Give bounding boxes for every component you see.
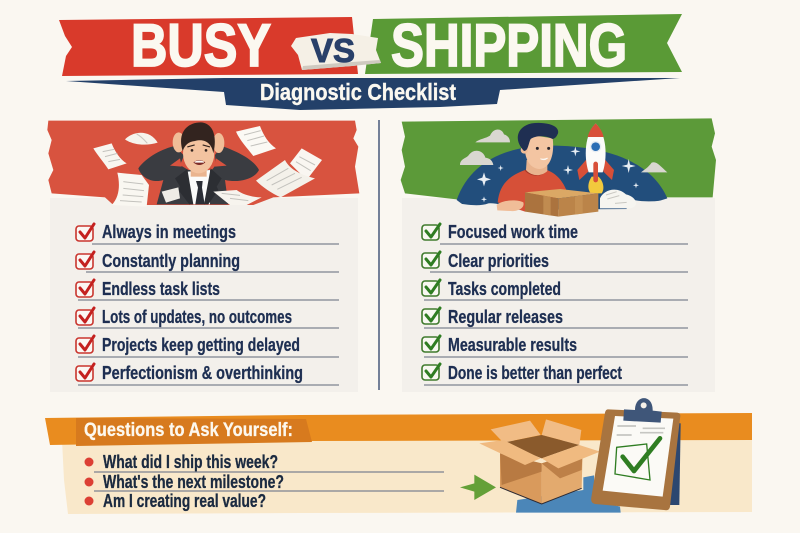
item: tasks completed: Tasks completed [448,279,561,299]
cream background [62,440,752,514]
item: tasks completed [422,279,688,300]
item: focused work time [422,222,688,244]
red banner: busy [59,12,358,79]
panel: busy [47,121,359,392]
icon: green arrow [460,475,496,500]
white cloud [600,190,636,208]
panel background [50,198,358,392]
illustration: box and clipboard [460,398,681,513]
item: measurable results [422,335,688,357]
green banner: shipping: SHIPPING [391,12,627,79]
question 1: What did I ship this week? [103,452,278,472]
panel background [402,198,715,392]
item: lots of updates: Lots of updates, no outcomes [102,307,292,327]
question 3: Am I creating real value? [103,491,266,511]
item: clear priorities [422,251,688,272]
question 2 [84,472,444,492]
illustration: man with box and rocket [401,118,716,217]
checklist: shipping [422,222,688,385]
night dome [457,146,667,210]
item: measurable results: Measurable results [448,335,577,355]
item: constantly planning [76,251,339,272]
blue patch [516,475,621,513]
checklist: busy [76,222,339,385]
red banner: busy: BUSY [131,12,271,79]
question 2: What's the next milestone? [103,472,284,492]
person [498,170,567,212]
clouds [475,129,510,142]
item: focused work time: Focused work time [448,222,578,242]
heading: Questions to Ask Yourself: [84,420,293,441]
item: regular releases: Regular releases [448,307,563,327]
rocket [577,158,614,180]
item: constantly planning: Constantly planning [102,251,240,271]
vs torn paper badge [291,32,381,70]
item: projects delayed: Projects keep getting delayed [102,335,300,355]
flying papers [93,126,322,207]
man [138,122,259,204]
title banner [59,12,682,110]
item: endless task lists [76,279,339,300]
item: always in meetings: Always in meetings [102,222,236,242]
illustration: stressed man with papers [47,121,359,207]
panel: questions [45,398,752,514]
icon: clipboard [591,398,681,510]
item: done is better: Done is better than perfect [448,363,622,383]
icon: open box [479,419,600,504]
item: clear priorities: Clear priorities [448,251,549,271]
question 1 [84,452,444,472]
item: regular releases [422,307,688,328]
orange strip [45,413,752,445]
cardboard box [525,189,598,198]
panel: shipping [401,118,716,392]
item: always in meetings [76,222,339,244]
vs torn paper badge: VS [311,32,355,69]
heading [76,418,312,446]
question list [84,452,444,511]
subtitle ribbon: Diagnostic Checklist [260,79,456,105]
item: perfectionism: Perfectionism & overthinking [102,363,303,383]
item: endless task lists: Endless task lists [102,279,220,299]
bottom cloud edge [453,202,523,215]
subtitle ribbon [66,78,680,110]
